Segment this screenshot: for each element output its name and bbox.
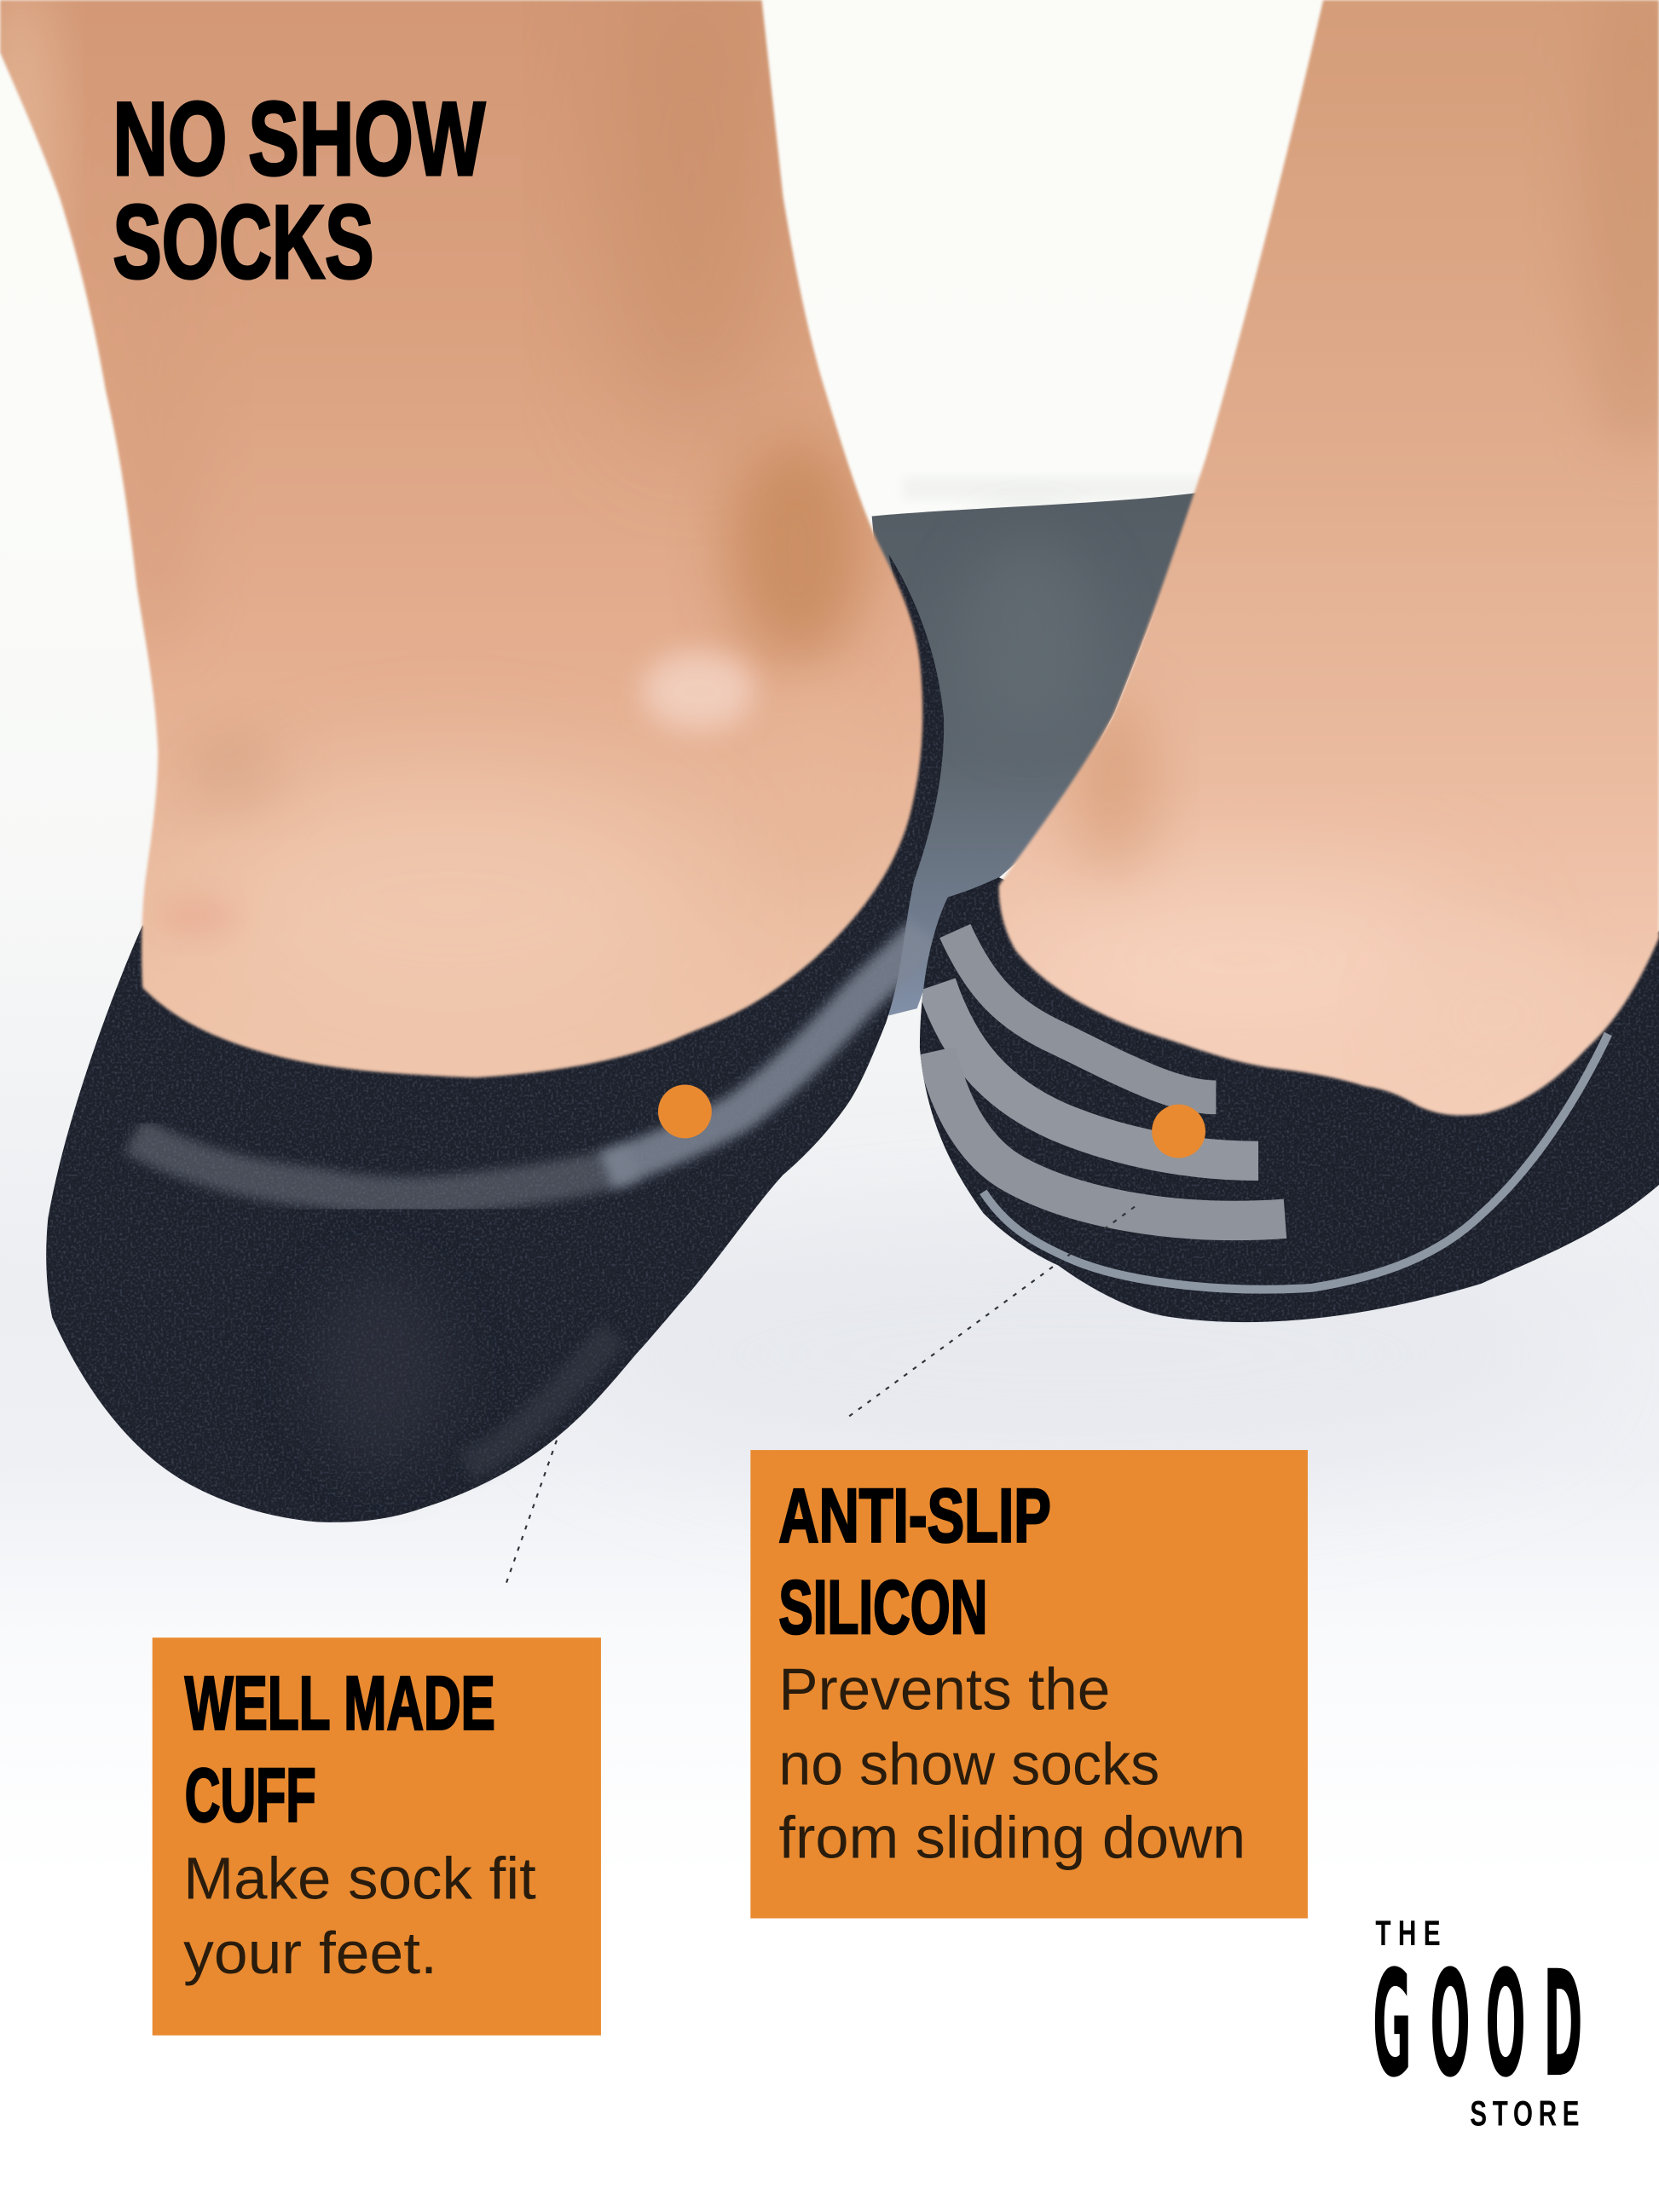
right sock — [920, 877, 1659, 1322]
dotted leader: silicon — [849, 1206, 1136, 1416]
callout: anti-slip silicon: from sliding down — [778, 1804, 1246, 1870]
title — [113, 80, 486, 300]
logo: the good store: GOOD — [1373, 1938, 1583, 2110]
callout: well made cuff: WELL MADE — [185, 1660, 495, 1746]
title: SOCKS — [113, 183, 374, 300]
photo: socks and feet — [0, 0, 1659, 1522]
callout: anti-slip silicon: no show socks — [778, 1730, 1159, 1797]
left sock stripe — [134, 1135, 635, 1197]
left sock — [46, 554, 944, 1522]
title: NO SHOW — [113, 80, 486, 197]
logo: the good store: THE — [1375, 1913, 1448, 1953]
callout: well made cuff: Make sock fit — [183, 1845, 536, 1911]
callout: well made cuff — [153, 1637, 601, 2036]
callout: well made cuff: CUFF — [185, 1752, 316, 1837]
right sock silicon stripes — [937, 931, 1285, 1221]
dotted leader: cuff — [506, 1439, 558, 1583]
right sock seam — [983, 1034, 1608, 1290]
marker dot: cuff — [658, 1085, 712, 1138]
callout: anti-slip silicon: ANTI-SLIP — [778, 1473, 1051, 1558]
callout: anti-slip silicon — [750, 1450, 1308, 1918]
callout: well made cuff: your feet. — [183, 1920, 437, 1986]
back sock, grey — [872, 493, 1202, 1015]
logo: the good store: STORE — [1470, 2094, 1585, 2134]
right leg skin — [974, 0, 1659, 1129]
marker dot: silicon — [1152, 1105, 1205, 1158]
left sock heel ribbing — [310, 1269, 452, 1467]
callout: anti-slip silicon: Prevents the — [778, 1656, 1110, 1723]
callout: anti-slip silicon: SILICON — [778, 1564, 987, 1649]
left leg skin — [0, 0, 987, 1100]
